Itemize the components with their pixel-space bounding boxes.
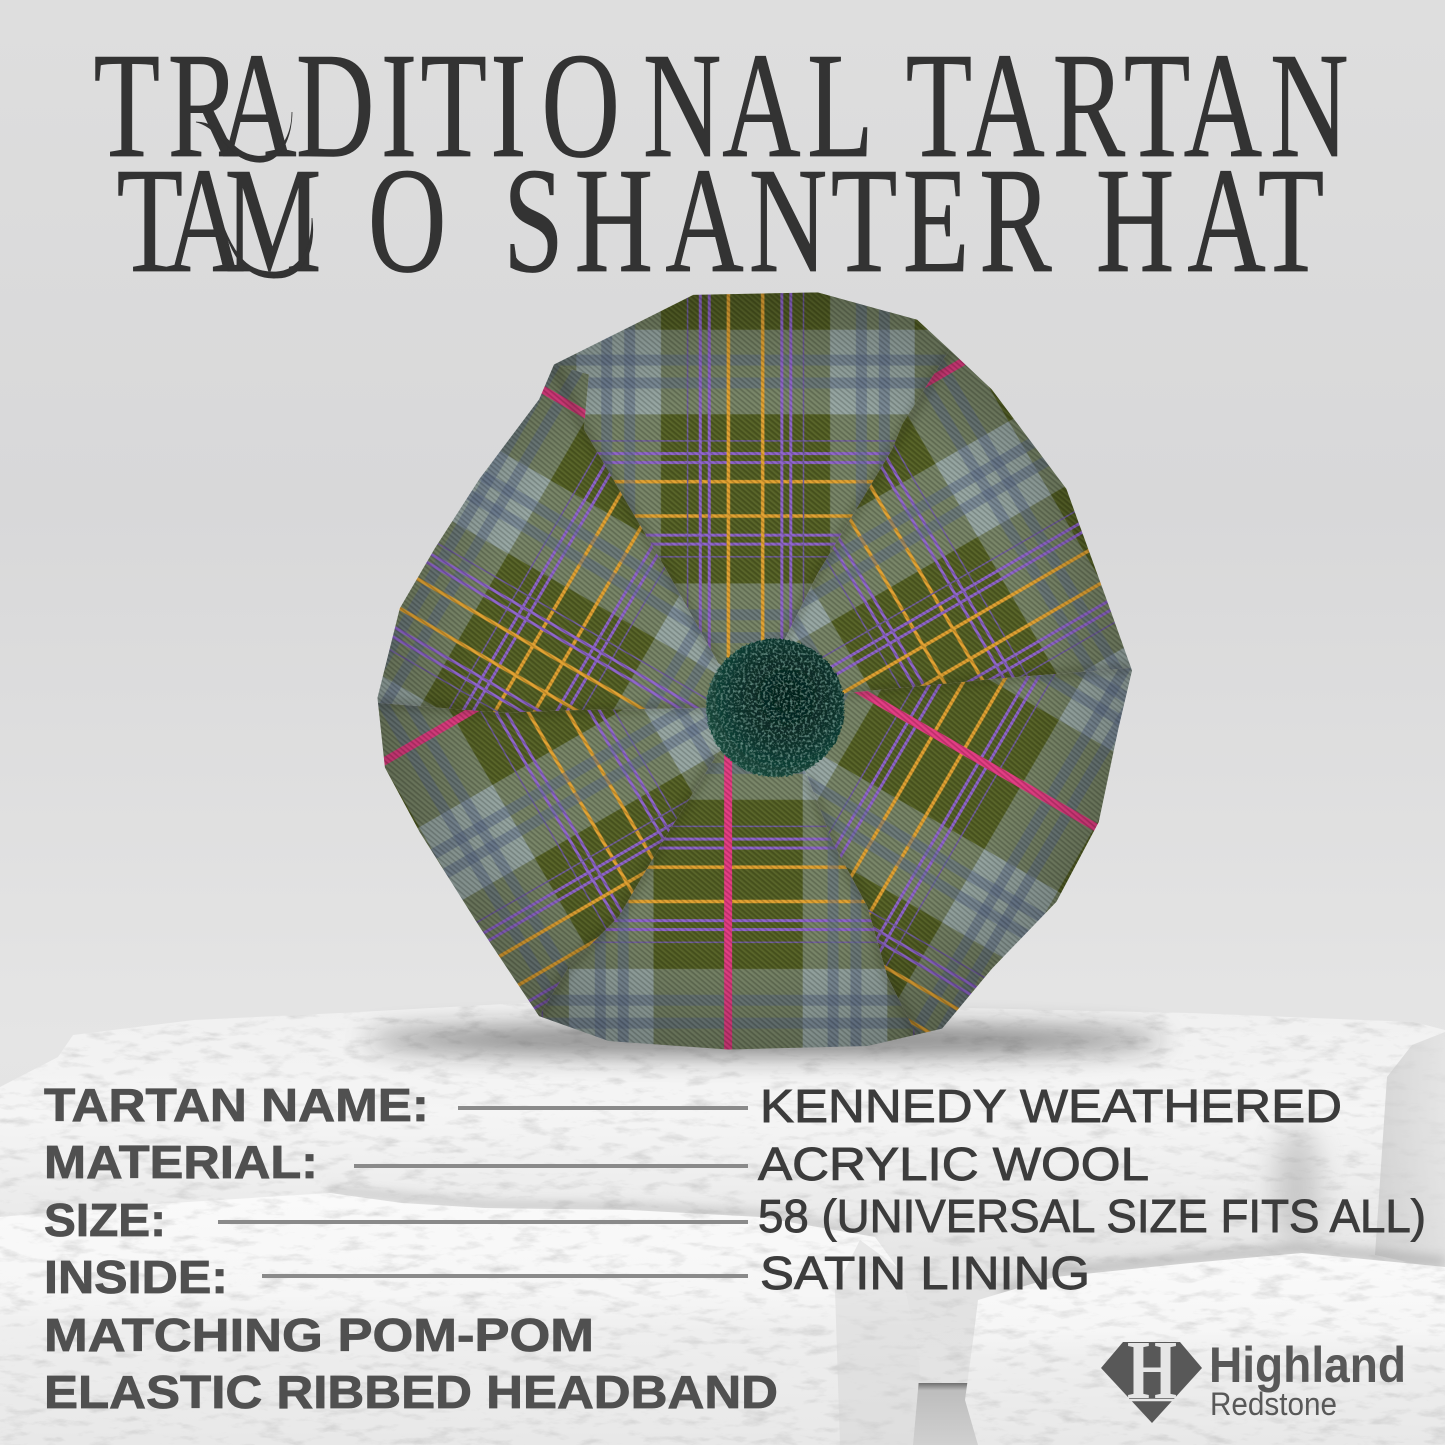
panel: bottom: [539, 750, 916, 1050]
panel: upper right: [784, 350, 1131, 694]
panel: lower right: [804, 668, 1132, 1034]
spec labels: INSIDE:: [44, 1251, 228, 1303]
spec values: KENNEDY WEATHERED: [760, 1080, 1342, 1132]
spec values: ACRYLIC WOOL: [758, 1138, 1149, 1190]
spec labels: [44, 1079, 778, 1418]
tartan hat: [378, 292, 1132, 1050]
logo mark: H: [1127, 1324, 1177, 1417]
spec labels: MATCHING POM-POM: [44, 1309, 594, 1361]
spec labels: ELASTIC RIBBED HEADBAND: [44, 1366, 778, 1418]
pom-pom: [706, 639, 845, 777]
panel: lower left: [378, 702, 721, 1016]
stone plinth: [0, 1003, 1445, 1445]
spec labels: TARTAN NAME:: [44, 1079, 429, 1131]
spec labels: MATERIAL:: [44, 1136, 318, 1188]
edge vignette: [360, 270, 1156, 1066]
panel: upper left: [378, 364, 721, 713]
spec values: [758, 1080, 1426, 1299]
spec labels: SIZE:: [44, 1194, 166, 1246]
pleat shading: [377, 350, 1131, 1046]
hat contact shadow: [365, 1026, 1165, 1054]
logo: [1101, 1324, 1406, 1423]
title: [94, 23, 1349, 304]
title: TAM O SHANTER HAT: [117, 138, 1324, 304]
spec values: SATIN LINING: [760, 1247, 1090, 1299]
logo wordmark: Highland: [1209, 1337, 1406, 1393]
spec values: 58 (UNIVERSAL SIZE FITS ALL): [758, 1190, 1426, 1242]
panel: top: [554, 292, 950, 665]
logo sub-wordmark: Redstone: [1210, 1386, 1337, 1422]
leader lines: [218, 1106, 748, 1278]
logo mark: [1101, 1324, 1202, 1423]
title: TRADITIONAL TARTAN: [94, 23, 1349, 189]
